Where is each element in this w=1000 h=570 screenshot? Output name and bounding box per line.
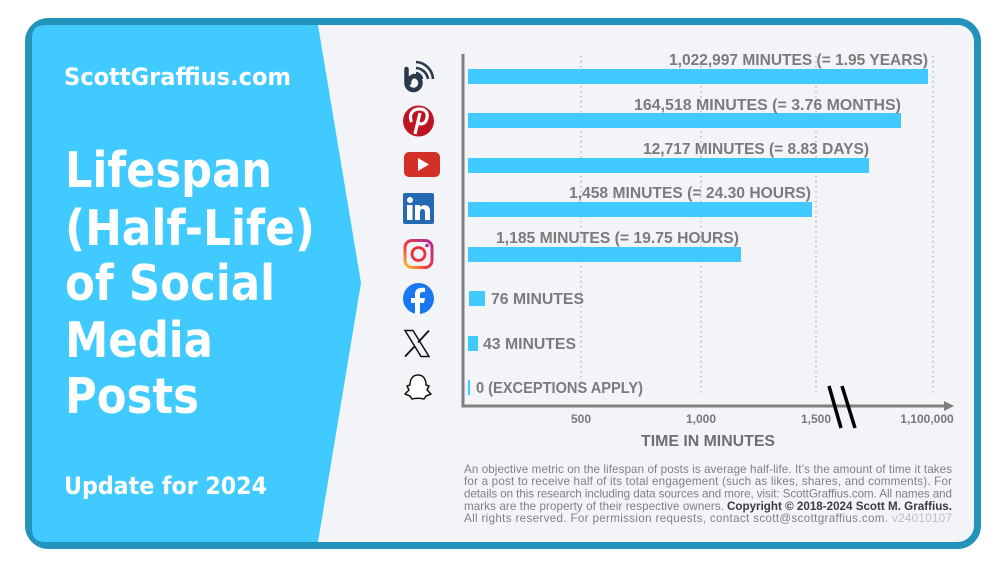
footer note: for a post to receive half of its total engagement (such as likes, shares, and comments). For	[464, 475, 952, 488]
bar: Pinterest: 164,518 MINUTES (= 3.76 MONTHS)	[634, 97, 901, 114]
title: Media	[65, 312, 213, 369]
update line: Update for 2024	[64, 472, 267, 500]
icon: pinterest	[403, 106, 434, 136]
axis ticks: 500	[571, 412, 591, 426]
bar: X: 43 MINUTES	[483, 336, 576, 353]
bar: Pinterest	[468, 97, 901, 128]
bar: Snapchat: 0 (EXCEPTIONS APPLY)	[476, 380, 643, 397]
panel: title banner	[32, 25, 361, 542]
bar: LinkedIn	[468, 185, 812, 217]
bar: Blogging	[468, 52, 928, 84]
title: (Half-Life)	[65, 200, 315, 257]
footer note: All rights reserved. For permission requests, contact scott@scottgraffius.com.	[464, 512, 888, 525]
footer note: marks are the property of their respective owners.	[464, 500, 724, 513]
footer note: details on this research including data sources and more, visit: ScottGraffius.com. All names and	[464, 488, 952, 500]
footer note: v24010107	[892, 512, 952, 525]
footer note	[464, 463, 952, 525]
footer note: An objective metric on the lifespan of posts is average half-life. It’s the amount of time it takes	[464, 463, 952, 476]
site name: ScottGraffius.com	[64, 63, 291, 91]
icon: instagram	[405, 240, 432, 268]
bar: LinkedIn: 1,458 MINUTES (= 24.30 HOURS)	[569, 185, 811, 202]
title: Lifespan	[65, 142, 272, 199]
icon: linkedin	[403, 193, 434, 224]
icon: blog	[406, 62, 433, 90]
bar: YouTube: 12,717 MINUTES (= 8.83 DAYS)	[643, 141, 869, 158]
title: of Social	[65, 255, 275, 312]
bar: Instagram: 1,185 MINUTES (= 19.75 HOURS)	[496, 230, 739, 247]
icon: X	[405, 330, 429, 356]
icon: youtube	[404, 152, 440, 177]
axis ticks: 1,000	[686, 412, 716, 426]
icon: snapchat	[405, 375, 431, 399]
bar: YouTube	[468, 141, 869, 173]
bar: Facebook: 76 MINUTES	[491, 291, 584, 308]
bar: Blogging: 1,022,997 MINUTES (= 1.95 YEARS)	[669, 52, 928, 69]
axis break	[829, 386, 855, 428]
bar chart	[463, 52, 954, 450]
title: Posts	[65, 368, 199, 425]
axis ticks	[571, 412, 954, 426]
axis ticks: 1,100,000	[900, 412, 954, 426]
bar: Instagram	[468, 230, 741, 262]
footer note: Copyright © 2018-2024 Scott M. Graffius.	[727, 500, 952, 513]
axes	[463, 54, 954, 411]
icon: facebook	[403, 283, 434, 314]
axis ticks: 1,500	[801, 412, 831, 426]
axis title: TIME IN MINUTES	[641, 433, 775, 450]
title	[65, 142, 315, 425]
